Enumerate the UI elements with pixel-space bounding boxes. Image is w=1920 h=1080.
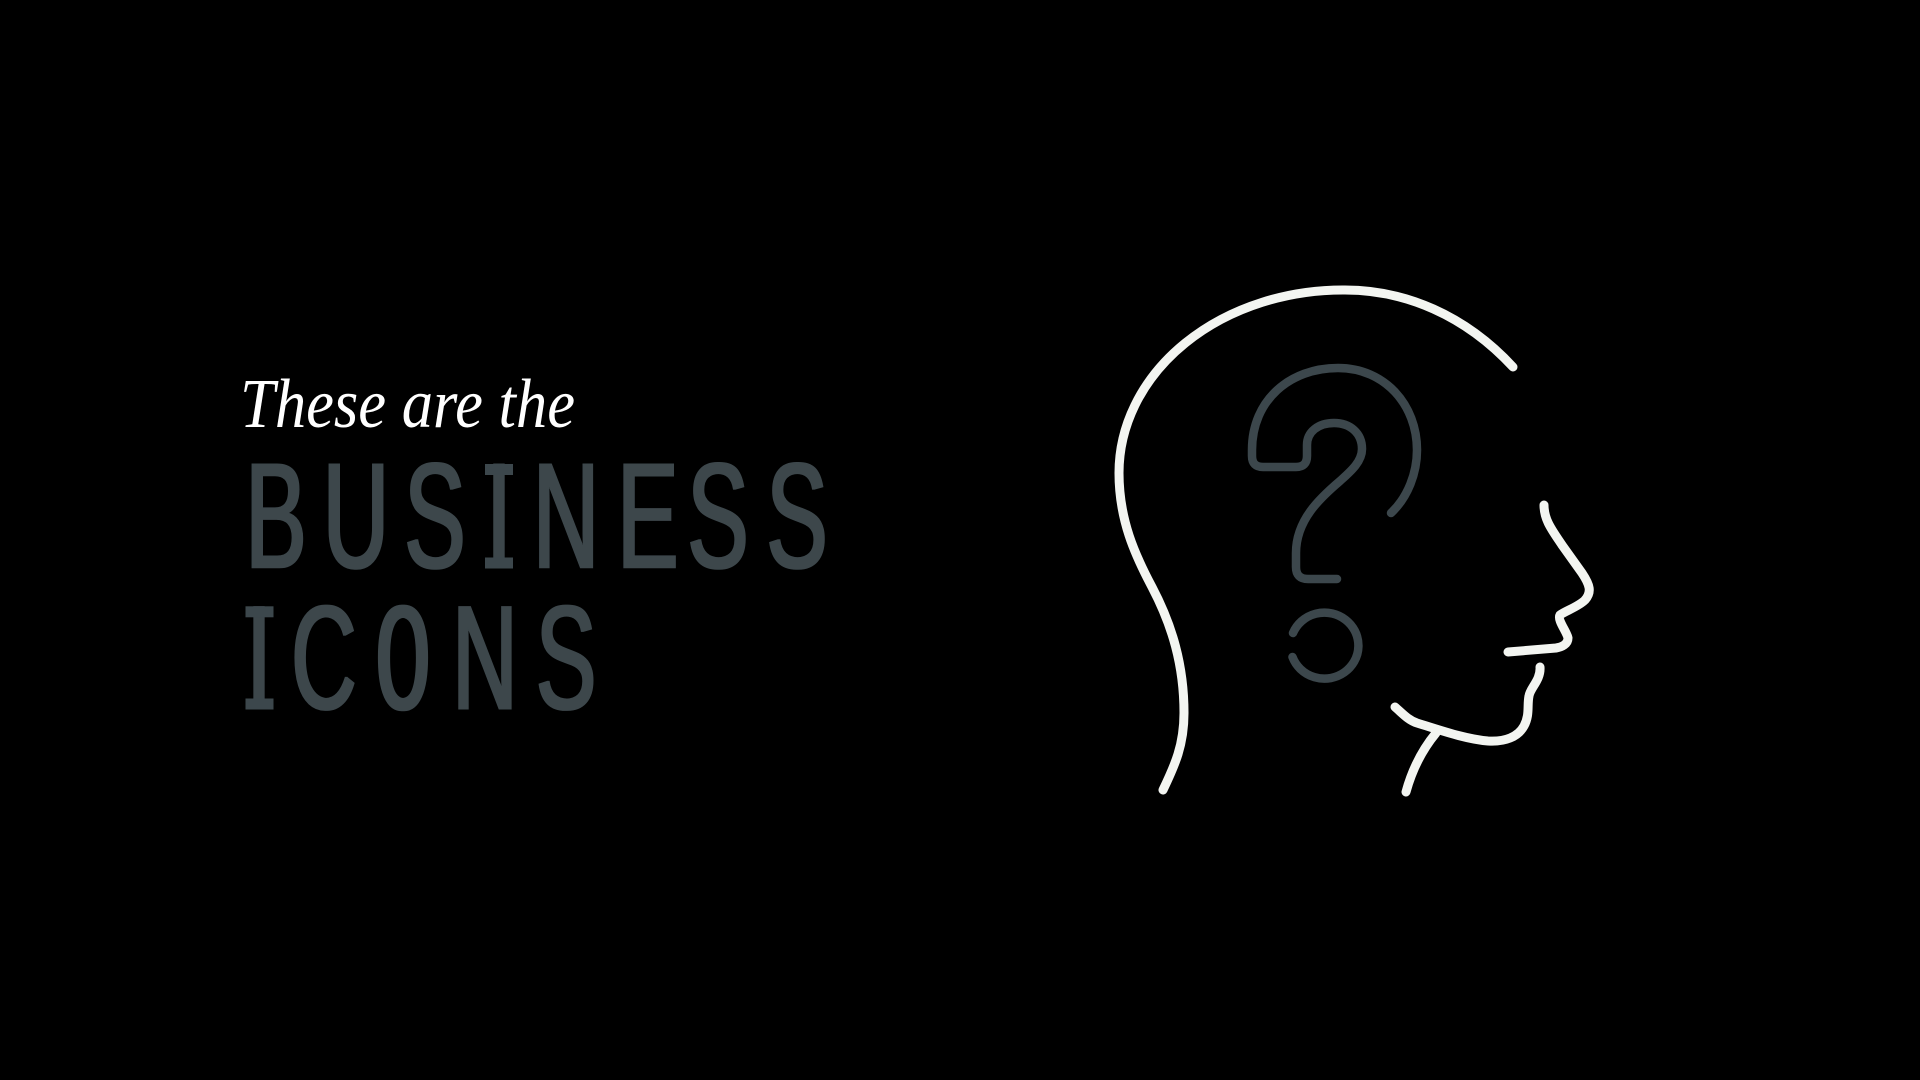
question mark dot (1292, 613, 1358, 679)
heading line: ICONS (246, 575, 596, 756)
face: nose and lips (1508, 505, 1589, 652)
subtitle: These are the: These are the (240, 366, 575, 443)
heading line: ICONS: NS (452, 575, 596, 740)
heading line: ICONS: IC (246, 575, 357, 740)
front of neck (1406, 733, 1436, 792)
icon: head in profile with question mark (1119, 290, 1589, 792)
title block (240, 366, 828, 756)
heading line: ICONS: O (375, 580, 431, 756)
chin and jaw (1395, 667, 1540, 741)
heading line: BUSINESS: BUSINESS (246, 433, 828, 600)
head outline: skull and back of neck (1119, 290, 1513, 790)
question mark hook (1252, 368, 1417, 579)
